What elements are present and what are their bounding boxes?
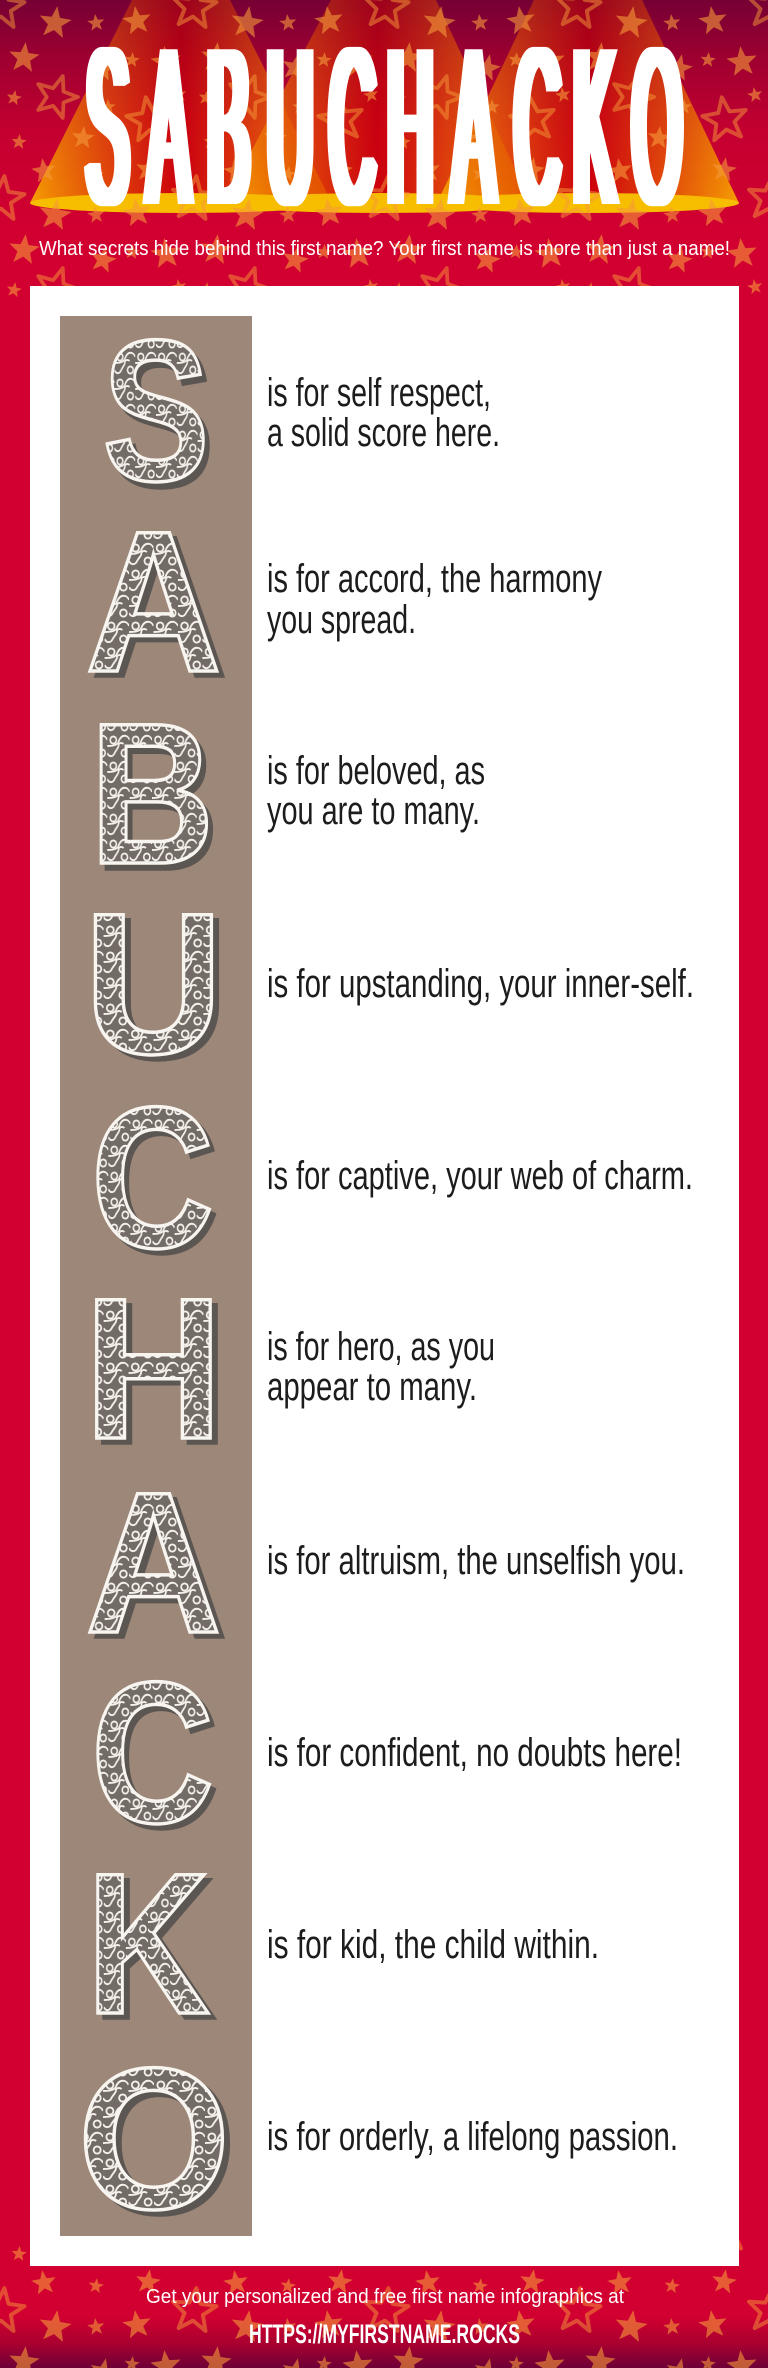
spotlights	[30, 0, 739, 213]
letter U: U	[84, 871, 223, 1096]
text: A: you spread.	[267, 598, 416, 642]
title: SABUCHACKO	[87, 1, 682, 253]
footer text: Get your personalized and free first name infographics at	[146, 2286, 624, 2308]
brown letter column	[60, 298, 252, 2251]
letter A: A	[85, 490, 222, 714]
text: B	[267, 749, 485, 833]
text: B: you are to many.	[267, 789, 480, 833]
letter S: S	[102, 298, 210, 523]
white panel	[30, 286, 739, 2266]
text: S: a solid score here.	[267, 411, 500, 455]
letter K: K	[86, 1831, 210, 2056]
letter O: O	[77, 2027, 231, 2251]
text: A: is for accord, the harmony	[267, 557, 602, 601]
text: H: is for hero, as you	[267, 1325, 495, 1369]
letter B: B	[90, 681, 214, 906]
text: K: is for kid, the child within.	[267, 1923, 599, 1967]
text: A	[267, 557, 602, 642]
text: S: is for self respect,	[267, 371, 491, 415]
text: H: appear to many.	[267, 1365, 477, 1409]
letter C: C	[91, 1065, 214, 1290]
subtitle: What secrets hide behind this first name? Your first name is more than just a name!	[39, 238, 730, 260]
panel: content	[60, 298, 694, 2251]
text: S	[267, 371, 500, 455]
text: H	[267, 1325, 495, 1409]
text: B: is for beloved, as	[267, 749, 485, 793]
letter H: H	[84, 1256, 223, 1481]
letter A: A	[85, 1451, 222, 1675]
footer url: HTTPS://MYFIRSTNAME.ROCKS	[249, 2319, 520, 2349]
letter C: C	[91, 1640, 214, 1865]
